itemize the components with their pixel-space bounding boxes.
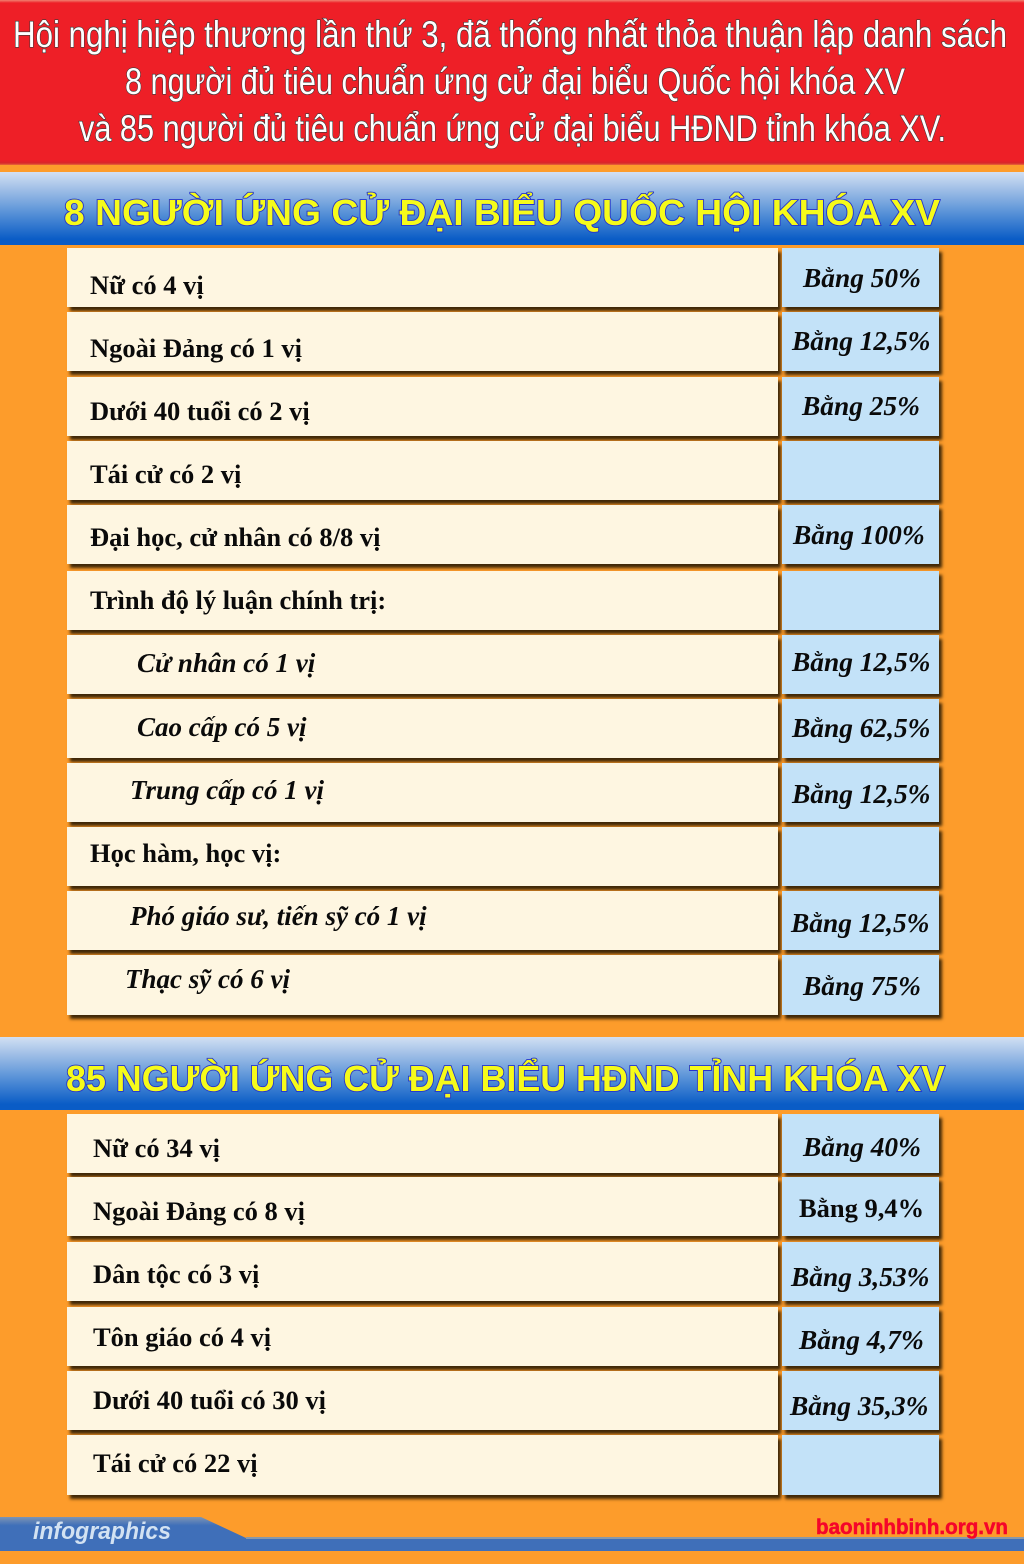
row: academic titles: Học hàm, học vị: [90,838,281,868]
row: ethnic minority [67,1242,944,1308]
section heading: 85 candidates for provincial council: 85 NGƯỜI ỨNG CỬ ĐẠI BIỂU HĐND TỈNH KHÓA XV [66,1058,946,1099]
table: provincial council candidates [67,1114,944,1502]
row: under 40 [67,377,944,442]
row: political theory: Trình độ lý luận chính trị: [90,585,386,615]
row: non-party: Bằng 9,4% [799,1193,924,1223]
row: religion: Tôn giáo có 4 vị [93,1322,271,1352]
row: women: Bằng 40% [803,1132,921,1162]
row: advanced: Cao cấp có 5 vị [137,712,306,742]
row: associate professor: Phó giáo sư, tiến sỹ có 1 vị [130,901,427,931]
title banner: 8 người đủ tiêu chuẩn ứng cử đại biểu Quốc hội khóa XV [125,62,906,103]
row: advanced [67,699,944,764]
section heading: 8 candidates for National Assembly [0,172,1024,245]
section heading: 8 candidates for National Assembly: 8 NGƯỜI ỨNG CỬ ĐẠI BIỂU QUỐC HỘI KHÓA XV [64,192,941,233]
row: non-party [67,1177,944,1242]
row: masters [67,955,944,1022]
title banner [0,0,1024,165]
row: under 40: Dưới 40 tuổi có 30 vị [93,1385,326,1415]
row: university [67,505,944,570]
row: women [67,1114,944,1180]
row: university: Bằng 100% [793,520,925,550]
row: women [67,248,944,314]
row: associate professor: Bằng 12,5% [791,908,930,938]
row: bachelor [67,635,944,700]
table: National Assembly candidates [67,248,944,1022]
row: re-election: Tái cử có 22 vị [93,1448,258,1478]
row: bachelor: Bằng 12,5% [792,647,930,677]
row: bachelor: Cử nhân có 1 vị [137,648,315,678]
row: non-party: Ngoài Đảng có 8 vị [93,1196,305,1226]
row: associate professor [67,891,944,956]
row: under 40 [67,1371,944,1436]
row: ethnic minority: Bằng 3,53% [791,1262,930,1292]
row: non-party [67,312,944,378]
row: intermediate [67,763,944,828]
row: under 40: Dưới 40 tuổi có 2 vị [90,396,310,426]
row: political theory [67,571,944,636]
row: intermediate: Trung cấp có 1 vị [130,775,324,805]
title banner: và 85 người đủ tiêu chuẩn ứng cử đại biểu HĐND tỉnh khóa XV. [79,109,946,150]
footer bar [0,1517,1024,1551]
row: under 40: Bằng 25% [802,391,920,421]
title banner: Hội nghị hiệp thương lần thứ 3, đã thống nhất thỏa thuận lập danh sách [13,15,1007,56]
row: masters: Bằng 75% [803,971,921,1001]
row: women: Bằng 50% [803,263,921,293]
row: university: Đại học, cử nhân có 8/8 vị [90,522,380,552]
section heading: 85 candidates for provincial council [0,1037,1024,1110]
row: re-election [67,1435,944,1502]
row: intermediate: Bằng 12,5% [792,779,930,809]
row: re-election [67,441,944,506]
row: religion: Bằng 4,7% [799,1325,924,1355]
row: women: Nữ có 34 vị [93,1133,220,1163]
row: non-party: Ngoài Đảng có 1 vị [90,333,302,363]
row: advanced: Bằng 62,5% [792,713,930,743]
row: women: Nữ có 4 vị [90,270,204,300]
footer label: infographics: infographics [33,1518,171,1545]
row: academic titles [67,827,944,892]
row: non-party: Bằng 12,5% [792,326,930,356]
row: re-election: Tái cử có 2 vị [90,459,241,489]
row: religion [67,1307,944,1372]
row: ethnic minority: Dân tộc có 3 vị [93,1259,259,1289]
row: masters: Thạc sỹ có 6 vị [125,964,290,994]
row: under 40: Bằng 35,3% [790,1391,928,1421]
